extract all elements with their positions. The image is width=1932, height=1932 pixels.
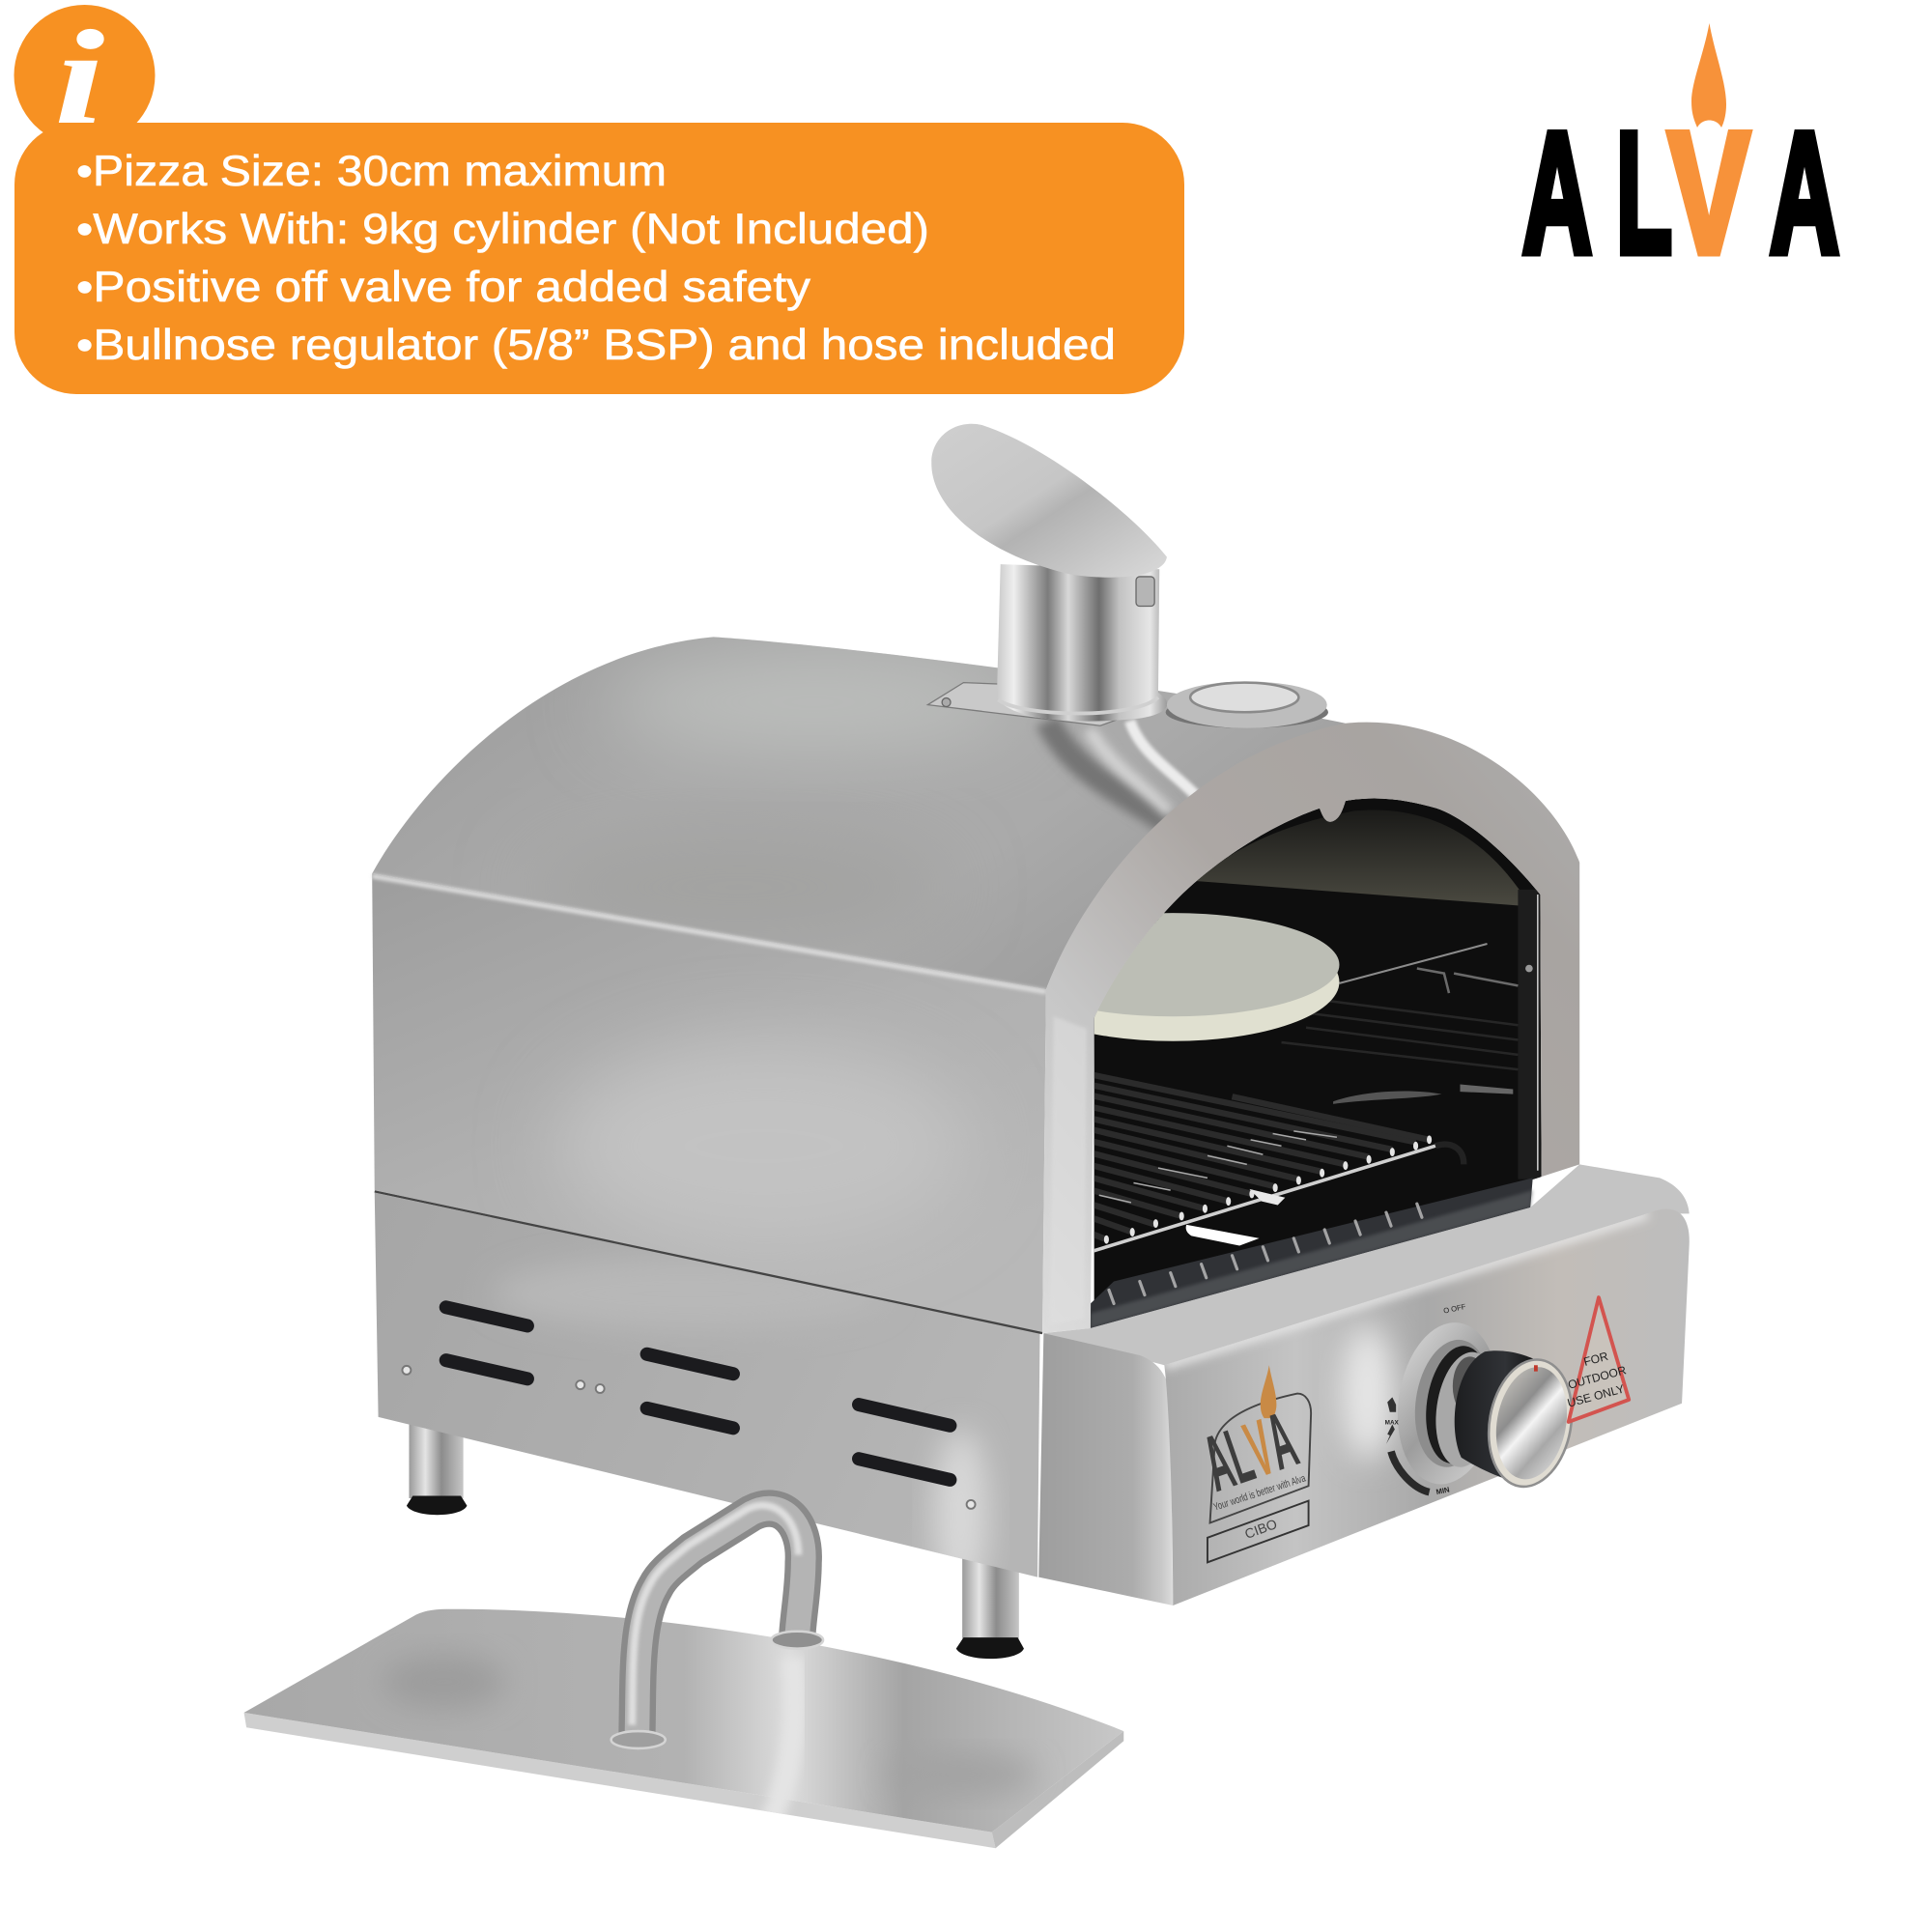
burner control box: [1038, 1164, 1690, 1605]
front leg: [956, 1552, 1024, 1659]
upper rack: [1339, 944, 1488, 983]
rivets: [402, 1366, 976, 1509]
rear leg: [407, 1417, 467, 1515]
peel handle: [611, 1505, 823, 1748]
pizza stone: [1094, 923, 1339, 1041]
specifications panel: [14, 123, 1184, 394]
outdoor warning label: OUTDOOR: [1567, 1363, 1628, 1392]
control knob: [1455, 1350, 1581, 1493]
chimney cap: [931, 424, 1167, 578]
spec: valve: •Positive off valve for added safety: [76, 264, 811, 311]
interior side strip: [1518, 890, 1540, 1179]
flame and spark marks: [1386, 1397, 1396, 1444]
logo wordmark: V: [1668, 97, 1749, 289]
oven dome top: [372, 637, 1346, 992]
logo wordmark: A: [1522, 97, 1592, 289]
oven interior: [1094, 798, 1542, 1300]
knob bezel: [1387, 1316, 1508, 1491]
box top surface: [1043, 1164, 1690, 1365]
logo wordmark: L: [1616, 97, 1672, 289]
knob scale labels: O OFF: [1442, 1302, 1466, 1316]
handle tube: [637, 1509, 804, 1735]
vent slots: [446, 1307, 950, 1480]
oven front arch frame: [1042, 723, 1579, 1333]
Alva logo: [1522, 23, 1839, 289]
knob scale labels: MIN: [1435, 1485, 1450, 1496]
handle ferrules: [771, 1632, 823, 1649]
knob scale labels: [1385, 1302, 1466, 1496]
panel logo plate: [1193, 1365, 1311, 1562]
outdoor warning label: FOR: [1582, 1350, 1609, 1369]
back wall ribs: [1282, 998, 1518, 1069]
white slots: [1186, 1225, 1260, 1246]
badge circle: [14, 5, 155, 146]
pizza oven product illustration: [244, 424, 1690, 1848]
panel logo plate: Your world is better with Alva: [1212, 1472, 1308, 1514]
info badge: [14, 2, 155, 152]
grill rod tips: [1104, 1135, 1432, 1244]
interior ceiling: [1195, 810, 1520, 905]
peel base plate: [244, 1609, 1123, 1848]
panel logo plate: CIBO: [1242, 1516, 1279, 1542]
spec: pizza size: •Pizza Size: 30cm maximum: [76, 148, 667, 195]
box front panel: [1164, 1208, 1690, 1605]
chimney: [927, 424, 1167, 725]
dome fold highlight: [372, 876, 1046, 992]
panel logo plate: ALVA: [1193, 1396, 1307, 1509]
grill front rail: [1091, 1146, 1435, 1252]
panel background: [14, 123, 1184, 394]
spec: regulator: •Bullnose regulator (5/8” BSP) and hose included: [76, 322, 1116, 369]
logo wordmark: A: [1770, 97, 1839, 289]
logo flame: [1691, 23, 1726, 128]
lower vented box: [375, 1193, 1040, 1602]
box left panel: [1038, 1333, 1173, 1605]
back wall burner reflections: [1333, 1091, 1441, 1104]
grill rod highlights: [1099, 1131, 1337, 1203]
spec: cylinder: •Works With: 9kg cylinder (Not Included): [76, 206, 929, 253]
outdoor warning label: USE ONLY: [1566, 1382, 1626, 1410]
grill rods: [1094, 1072, 1428, 1242]
burner tray: [1091, 1178, 1533, 1328]
oven side wall: [372, 873, 1046, 1333]
outdoor warning label: [1566, 1297, 1629, 1422]
knob scale labels: MAX: [1385, 1419, 1400, 1426]
gauge cap: [1166, 681, 1328, 728]
chimney base plate: [927, 683, 1164, 725]
info i glyph: i: [54, 2, 105, 152]
chimney pipe: [997, 564, 1167, 722]
